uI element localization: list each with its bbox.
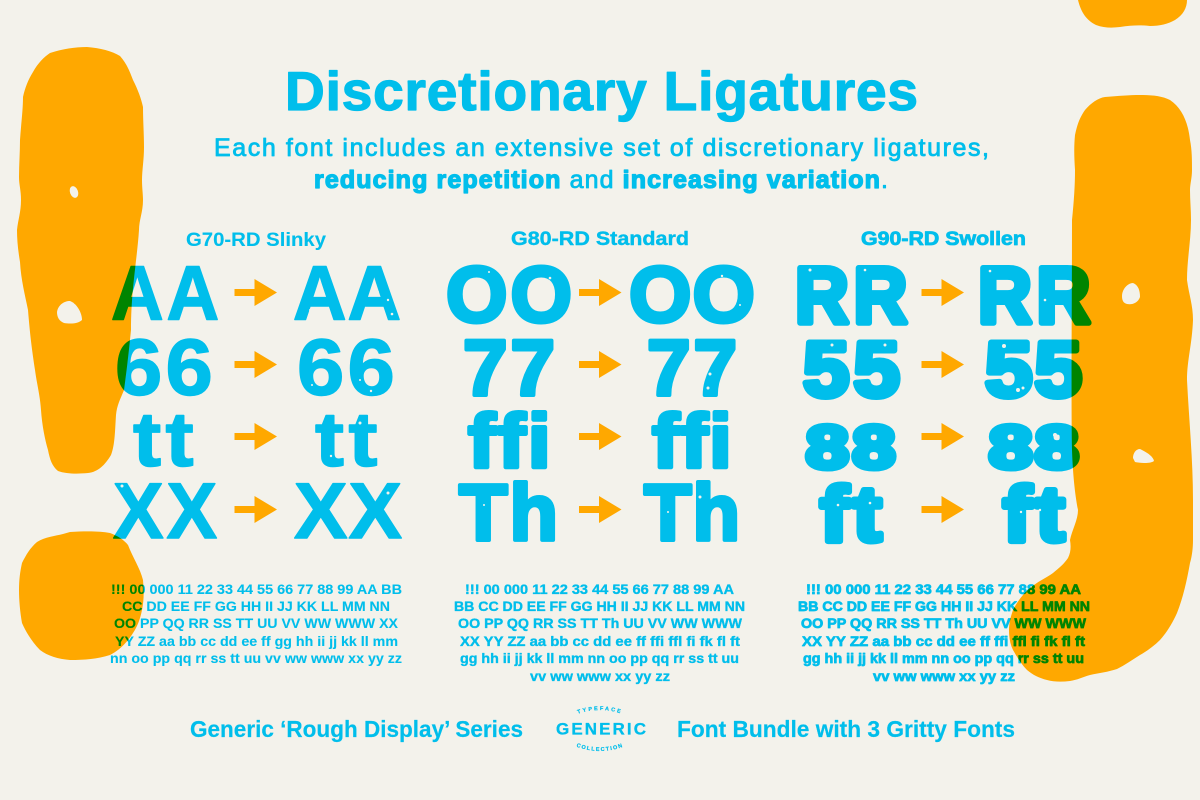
footer right text: Font Bundle with 3 Gritty Fonts [677, 716, 1015, 742]
arrow row 2 column 3 [922, 351, 964, 378]
Th before: Th [459, 468, 560, 557]
blob: right tall shape [1009, 95, 1193, 682]
logo wordmark: GENERIC [556, 720, 646, 738]
line 3: OO PP QQ RR SS TT Th UU VV WW WWW [458, 616, 742, 631]
logo: Generic typeface collection [556, 706, 646, 752]
title: Discretionary Ligatures [285, 60, 918, 122]
88 after: 88 [989, 414, 1081, 481]
arrow row 1 column 2 [579, 279, 622, 306]
XX before: XX [113, 466, 220, 555]
OO after: OO [629, 250, 756, 338]
line 6: vv ww www xx yy zz [873, 669, 1015, 684]
column 2 specimens [446, 250, 756, 557]
logo arc top: TYPEFACE [576, 706, 621, 714]
77 before: 77 [463, 323, 558, 412]
arrow row 3 column 2 [579, 423, 622, 450]
arrow row 3 column 1 [234, 423, 277, 450]
ffi after: ffi [652, 399, 733, 484]
arrow row 2 column 1 [234, 351, 277, 378]
column 1 specimens [111, 250, 403, 555]
line 1: !!! 00 000 11 22 33 44 55 66 77 88 99 AA [465, 582, 734, 597]
tt after: tt [315, 397, 382, 483]
XX after: XX [294, 466, 403, 555]
line 2: CC DD EE FF GG HH II JJ KK LL MM NN [122, 599, 390, 614]
line 5: gg hh ii jj kk ll mm nn oo pp qq rr ss tt uu [803, 651, 1084, 666]
tt before: tt [133, 397, 198, 483]
arrow row 1 column 1 [234, 279, 277, 306]
line 4: XX YY ZZ aa bb cc dd ee ff ffi ffl fi fk fl ft [802, 634, 1086, 649]
arrow row 1 column 3 [922, 279, 964, 306]
55 after: 55 [985, 325, 1084, 413]
77 after: 77 [647, 323, 740, 412]
ffi before: ffi [468, 399, 553, 484]
column heading G80: G80-RD Standard [511, 228, 689, 250]
55 before: 55 [803, 325, 904, 413]
logo arc bottom: COLLECTION [576, 743, 622, 752]
RR before: RR [795, 251, 912, 340]
line 6: vv ww www xx yy zz [530, 669, 670, 684]
blob: top right [1078, 0, 1187, 28]
arrows [234, 279, 964, 523]
overprinted cyan text layer [110, 60, 1095, 752]
column heading G90: G90-RD Swollen [861, 228, 1026, 250]
character list column 1 [110, 582, 402, 666]
character list column 3 [798, 582, 1090, 684]
line 4: YY ZZ aa bb cc dd ee ff gg hh ii jj kk ll mm [115, 634, 398, 649]
column 3 specimens [795, 251, 1095, 558]
AA before: AA [111, 250, 222, 336]
arrow row 4 column 2 [579, 496, 622, 523]
line 5: gg hh ii jj kk ll mm nn oo pp qq rr ss tt uu [460, 651, 739, 666]
subtitle line 1: Each font includes an extensive set of discretionary ligatures, [214, 134, 989, 162]
arrow row 2 column 2 [579, 351, 622, 378]
88 before: 88 [806, 414, 899, 481]
arrow row 4 column 1 [234, 496, 277, 523]
character list column 2 [454, 582, 745, 684]
print speckles [120, 268, 1057, 524]
line 2: BB CC DD EE FF GG HH II JJ KK LL MM NN [798, 599, 1090, 614]
line 5: nn oo pp qq rr ss tt uu vv ww www xx yy zz [110, 651, 402, 666]
column heading G70: G70-RD Slinky [186, 229, 326, 251]
ft after: ft [1003, 470, 1069, 558]
line 1: !!! 00 000 11 22 33 44 55 66 77 88 99 AA [806, 582, 1081, 597]
blob holes [57, 185, 1154, 463]
subtitle line 2: reducing repetition and increasing variation. [314, 166, 888, 194]
66 before: 66 [115, 322, 216, 412]
arrow row 4 column 3 [922, 496, 964, 523]
line 3: OO PP QQ RR SS TT Th UU VV WW WWW [801, 616, 1086, 631]
RR after: RR [978, 251, 1095, 340]
line 2: BB CC DD EE FF GG HH II JJ KK LL MM NN [454, 599, 745, 614]
line 4: XX YY ZZ aa bb cc dd ee ff ffi ffl fi fk fl ft [460, 634, 741, 649]
OO before: OO [446, 250, 575, 338]
blob: left exclamation dot [19, 531, 144, 660]
line 1: !!! 00 000 11 22 33 44 55 66 77 88 99 AA BB [111, 582, 402, 597]
line 3: OO PP QQ RR SS TT UU VV WW WWW XX [114, 616, 398, 631]
AA after: AA [293, 250, 402, 336]
footer left text: Generic ‘Rough Display’ Series [190, 716, 523, 742]
66 after: 66 [297, 322, 398, 412]
arrow row 3 column 3 [922, 423, 964, 450]
ft before: ft [820, 470, 886, 558]
blob: left exclamation body [17, 47, 144, 474]
Th after: Th [644, 468, 741, 557]
